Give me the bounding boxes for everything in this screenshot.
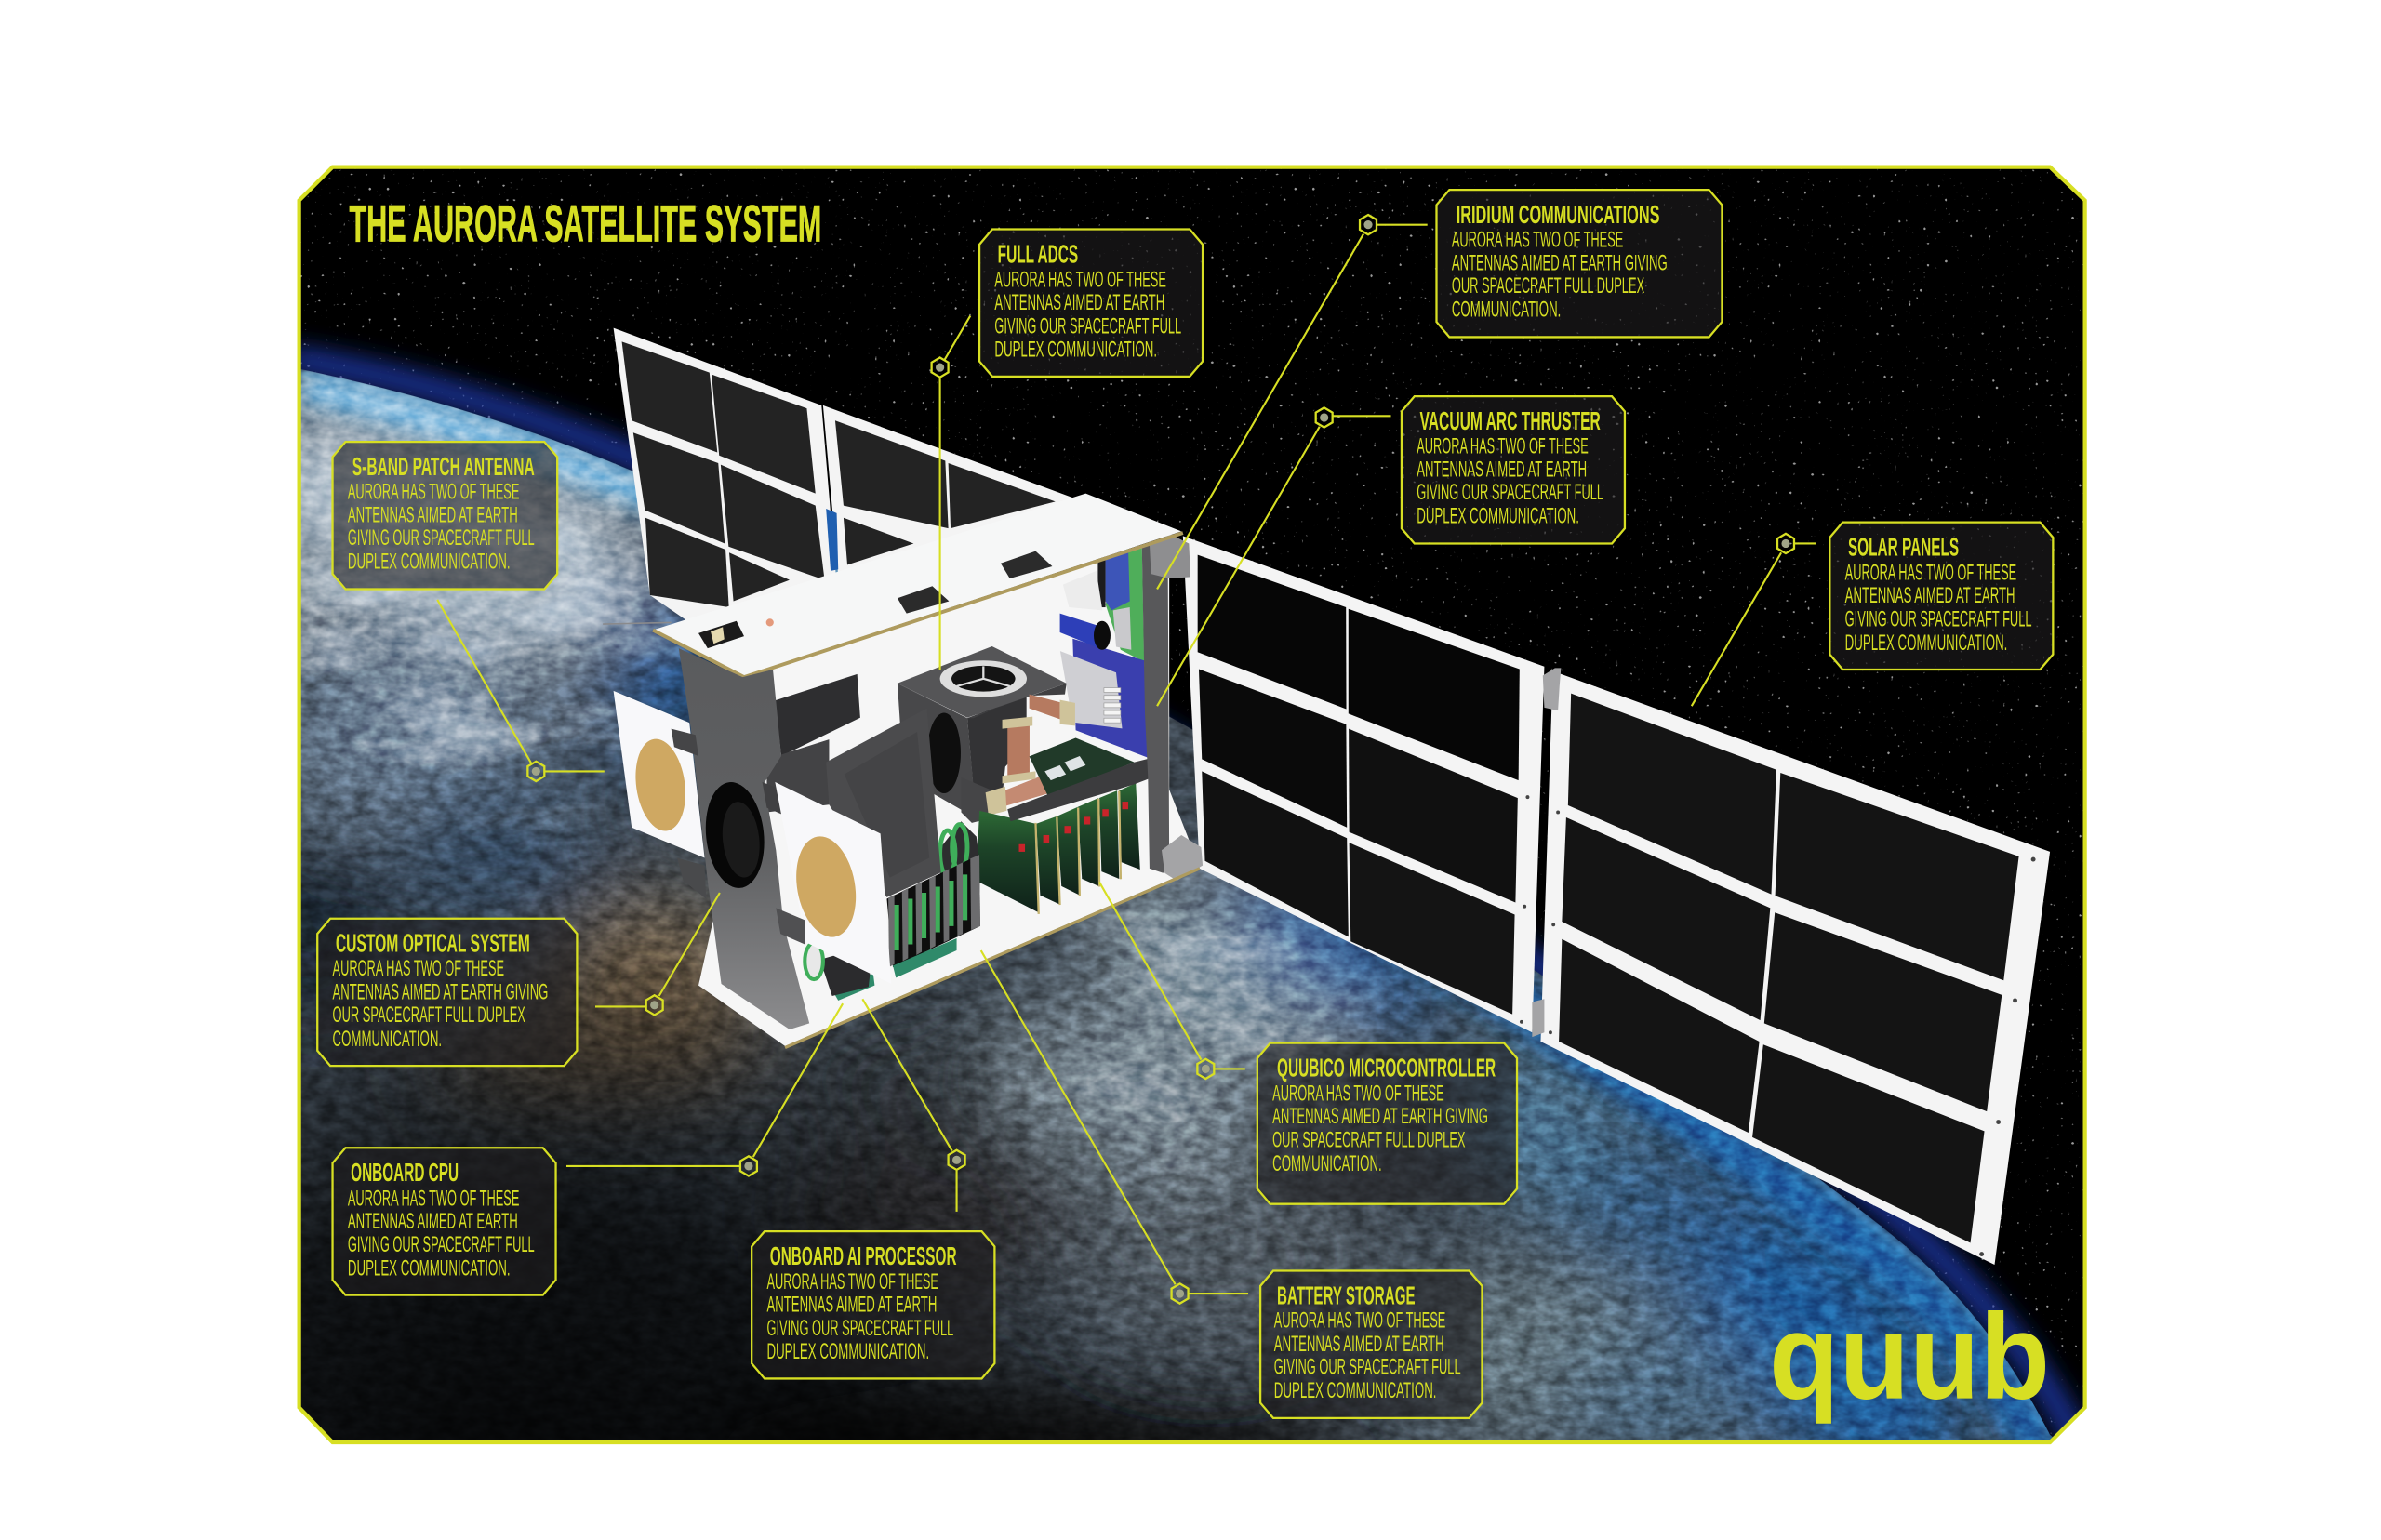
- top plate: [653, 494, 1183, 677]
- rear panel frames: [614, 328, 837, 626]
- title: THE AURORA SATELLITE SYSTEM: [350, 195, 821, 253]
- frame border: [299, 167, 2085, 1442]
- callout: S-band patch antenna: ANTENNAS AIMED AT EARTH: [348, 503, 518, 528]
- marker: [1197, 1059, 1214, 1079]
- connector 1: [698, 621, 744, 648]
- panel mounting holes: [1520, 795, 2036, 1256]
- background: space and Earth panel: [301, 169, 2083, 1440]
- leader line: [1692, 543, 1816, 706]
- cube left face: [898, 684, 977, 818]
- connector 2: [898, 586, 949, 614]
- optical aperture: [700, 779, 769, 891]
- reaction wheel ring: [940, 660, 1027, 697]
- left wing bracket lower: [677, 857, 706, 899]
- vertical coil: [1007, 725, 1030, 777]
- board 6: [1119, 783, 1140, 870]
- callout: Quubico microcontroller: OUR SPACECRAFT FULL DUPLEX: [1272, 1127, 1466, 1152]
- cube top face: [898, 646, 1067, 718]
- inner panel cells: [1198, 555, 1520, 1015]
- callout: solar panels: DUPLEX COMMUNICATION.: [1845, 631, 2007, 656]
- Earth limb bands: [299, 386, 2042, 1454]
- marker: [740, 1156, 757, 1175]
- rear panel cells: [622, 341, 1056, 607]
- callout: onboard AI processor: GIVING OUR SPACECRAFT FULL: [766, 1316, 953, 1341]
- callout: custom optical system: OUR SPACECRAFT FULL DUPLEX: [333, 1002, 525, 1028]
- leader: S-band patch antenna: [437, 600, 605, 781]
- plate gold edge: [653, 533, 1183, 677]
- bright limb highlight: [299, 372, 2050, 1436]
- leader: onboard AI processor: [862, 999, 965, 1212]
- callout: Iridium communications: OUR SPACECRAFT FULL DUPLEX: [1452, 273, 1644, 299]
- right solar panel wing inner: [1183, 536, 1544, 1032]
- lower hinge: [1162, 835, 1203, 881]
- leader: Quubico microcontroller: [1099, 883, 1245, 1079]
- cube right arm: [967, 684, 1067, 718]
- callout: full ADCS: GIVING OUR SPACECRAFT FULL: [994, 313, 1181, 339]
- marker: [646, 995, 663, 1015]
- leader: vacuum arc thruster: [1157, 407, 1391, 706]
- callout: full ADCS: DUPLEX COMMUNICATION.: [994, 338, 1157, 363]
- marker: [1172, 1283, 1189, 1304]
- marker: [949, 1150, 965, 1170]
- callout: custom optical system: COMMUNICATION.: [333, 1027, 442, 1052]
- callout: solar panels: ANTENNAS AIMED AT EARTH: [1845, 583, 2015, 608]
- leader: onboard CPU: [566, 1003, 843, 1175]
- leader: custom optical system: [595, 893, 720, 1015]
- right antenna panel: [763, 782, 891, 984]
- interior back wall and bottom plate: [698, 539, 1200, 1046]
- front frame column: [672, 648, 809, 1029]
- star field: [299, 167, 2085, 1442]
- cloud layer: [301, 500, 1387, 1175]
- grey cable: [603, 622, 672, 624]
- callout: battery storage: DUPLEX COMMUNICATION.: [1274, 1378, 1436, 1403]
- callout: onboard CPU: DUPLEX COMMUNICATION.: [348, 1255, 511, 1281]
- quub logo: quub: [1769, 1289, 2050, 1425]
- grey box inner face: [845, 732, 929, 878]
- dark opening: [1097, 552, 1106, 607]
- callout: battery storage: BATTERY STORAGE: [1277, 1281, 1416, 1309]
- callout: custom optical system: [317, 919, 577, 1066]
- callout: Quubico microcontroller: [1257, 1043, 1517, 1204]
- Earth surface: [301, 369, 2053, 1440]
- connector pins: [1104, 688, 1121, 723]
- blue capacitor: [1106, 550, 1130, 610]
- connector: [1113, 607, 1131, 650]
- white bracket: [1060, 651, 1123, 728]
- copper magnetorquer coils: [986, 695, 1075, 816]
- leader line: [862, 999, 957, 1212]
- callout: solar panels: [1829, 523, 2053, 670]
- battery rear housing: [938, 821, 979, 883]
- lower battery body: [820, 945, 873, 996]
- callout: S-band patch antenna: GIVING OUR SPACECRAFT FULL: [348, 525, 535, 551]
- callout: Quubico microcontroller: AURORA HAS TWO OF THESE: [1272, 1082, 1444, 1107]
- Earth tonal regions: [301, 370, 2002, 1440]
- marker: [932, 357, 949, 378]
- callout: custom optical system: ANTENNAS AIMED AT EARTH GIVING: [333, 979, 548, 1004]
- callout: vacuum arc thruster: VACUUM ARC THRUSTER: [1420, 406, 1601, 435]
- right frame column: [1142, 536, 1169, 873]
- board 3: [1057, 807, 1080, 896]
- callout: vacuum arc thruster: ANTENNAS AIMED AT EARTH: [1417, 458, 1587, 483]
- leader: battery storage: [981, 950, 1248, 1304]
- callout: Iridium communications: IRIDIUM COMMUNICATIONS: [1457, 200, 1659, 229]
- red chips: [1019, 802, 1128, 852]
- callout: onboard AI processor: AURORA HAS TWO OF THESE: [766, 1269, 938, 1294]
- PCB boards: [976, 783, 1140, 912]
- callout: S-band patch antenna: DUPLEX COMMUNICATION.: [348, 549, 511, 574]
- callout: Iridium communications: ANTENNAS AIMED AT EARTH GIVING: [1452, 251, 1668, 276]
- right patch antenna gold disc: [789, 831, 863, 942]
- green circuit board and capacitor: [1063, 547, 1144, 662]
- callout: onboard CPU: [333, 1148, 556, 1295]
- right bracket: [763, 782, 791, 818]
- callout: solar panels: AURORA HAS TWO OF THESE: [1845, 561, 2016, 586]
- callout: onboard AI processor: ANTENNAS AIMED AT EARTH: [766, 1293, 937, 1318]
- left antenna panel: [614, 691, 705, 857]
- grey beam: [766, 739, 829, 812]
- callout: battery storage: [1260, 1271, 1482, 1418]
- cylinder end: [1094, 621, 1111, 650]
- tray boards: [1030, 737, 1135, 796]
- callout: S-band patch antenna: [333, 442, 557, 589]
- green cells: [897, 874, 965, 950]
- lower battery cell: [805, 943, 823, 979]
- aperture inner: [719, 800, 763, 879]
- atmosphere glow: [288, 358, 2083, 1453]
- tray front beam: [1007, 758, 1152, 821]
- satellite illustration: [603, 328, 2050, 1265]
- callout: solar panels: SOLAR PANELS: [1848, 533, 1959, 562]
- callout: vacuum arc thruster: [1402, 396, 1625, 543]
- battery block: [832, 821, 980, 1001]
- callout: S-band patch antenna: S-BAND PATCH ANTENNA: [352, 452, 535, 481]
- left panel body: [614, 691, 705, 857]
- callout: custom optical system: AURORA HAS TWO OF THESE: [333, 956, 504, 981]
- marker: [1316, 407, 1333, 428]
- dark side of Earth: [299, 759, 1514, 1442]
- leader line: [1157, 416, 1391, 706]
- inner panel frame: [1183, 536, 1544, 1032]
- green battery rings: [940, 825, 967, 876]
- dark mounting plate: [775, 674, 860, 756]
- right solar panel wing outer: [1520, 671, 2050, 1265]
- battery grille base: [886, 855, 980, 967]
- left patch antenna gold disc: [630, 736, 691, 834]
- side reaction wheel: [927, 713, 961, 793]
- callout: onboard CPU: AURORA HAS TWO OF THESE: [348, 1186, 519, 1211]
- wheel spokes: [957, 666, 1010, 686]
- marker: [527, 762, 544, 781]
- wing hinges: [1532, 668, 1561, 1037]
- board 1: [976, 811, 1039, 912]
- callout: Quubico microcontroller: COMMUNICATION.: [1272, 1151, 1382, 1176]
- callout: full ADCS: FULL ADCS: [998, 239, 1078, 268]
- leader: full ADCS: [932, 316, 970, 670]
- lower coil: [1004, 774, 1048, 806]
- cube lower piece: [961, 777, 990, 823]
- outer panel frame: [1540, 671, 2050, 1265]
- board 4: [1078, 798, 1098, 886]
- column face: [679, 648, 809, 1029]
- connector 3: [1001, 551, 1052, 578]
- small pcb strip: [893, 938, 957, 977]
- white module: [1063, 571, 1102, 610]
- Earth base colour: [299, 304, 2085, 1457]
- reaction wheel opening: [951, 666, 1016, 692]
- callout: Quubico microcontroller: ANTENNAS AIMED AT EARTH GIVING: [1272, 1104, 1488, 1129]
- board 5: [1099, 790, 1119, 879]
- callout: full ADCS: ANTENNAS AIMED AT EARTH: [994, 290, 1164, 315]
- ADCS cube: [898, 646, 1067, 823]
- board 2: [1036, 816, 1060, 905]
- coil mounts: [986, 700, 1075, 816]
- copper pad: [766, 618, 774, 626]
- leader: solar panels: [1692, 534, 1816, 706]
- connector 1 face: [711, 627, 725, 644]
- lower pcb strip: [832, 974, 874, 1001]
- callout: solar panels: GIVING OUR SPACECRAFT FULL: [1845, 606, 2031, 631]
- upper coil: [1030, 695, 1060, 719]
- leader line: [566, 1003, 843, 1166]
- outer panel cells: [1559, 694, 2019, 1242]
- callout: onboard CPU: ANTENNAS AIMED AT EARTH: [348, 1209, 518, 1234]
- cube interior: [967, 696, 1027, 804]
- blue cylinder: [1060, 614, 1099, 648]
- leader line: [940, 316, 970, 670]
- rear panel blue gap: [826, 509, 838, 571]
- surface mottled texture: [299, 304, 2085, 1442]
- callout: battery storage: GIVING OUR SPACECRAFT FULL: [1274, 1355, 1461, 1380]
- callout: full ADCS: AURORA HAS TWO OF THESE: [994, 268, 1166, 293]
- lower right bracket: [776, 908, 805, 945]
- callout: Iridium communications: [1436, 190, 1722, 337]
- grey box housing: [826, 709, 941, 897]
- callout: vacuum arc thruster: AURORA HAS TWO OF THESE: [1417, 433, 1589, 458]
- callout: onboard AI processor: ONBOARD AI PROCESSOR: [770, 1241, 957, 1270]
- callout: onboard AI processor: [752, 1231, 994, 1378]
- callout: vacuum arc thruster: GIVING OUR SPACECRAFT FULL: [1417, 480, 1603, 505]
- lower battery: [805, 943, 873, 996]
- green board: [1106, 547, 1144, 662]
- callout: battery storage: ANTENNAS AIMED AT EARTH: [1274, 1332, 1444, 1357]
- callout: onboard CPU: ONBOARD CPU: [351, 1158, 459, 1187]
- marker: [1777, 534, 1794, 553]
- leader line: [1157, 225, 1428, 589]
- callout: vacuum arc thruster: DUPLEX COMMUNICATION.: [1417, 503, 1579, 528]
- grille bars: [888, 855, 980, 967]
- plate surface: [653, 494, 1181, 676]
- callout: onboard AI processor: DUPLEX COMMUNICATION.: [766, 1339, 929, 1364]
- bottom plate gold edge: [785, 869, 1200, 1048]
- callout: Iridium communications: COMMUNICATION.: [1452, 297, 1561, 322]
- leader line: [981, 950, 1248, 1294]
- callout: full ADCS: [979, 230, 1203, 377]
- leader line: [1099, 883, 1245, 1069]
- leader: Iridium communications: [1157, 215, 1428, 589]
- rear solar panel wing: [603, 328, 1085, 626]
- board edges: [1035, 791, 1121, 914]
- callout: custom optical system: CUSTOM OPTICAL SYSTEM: [336, 929, 530, 958]
- callout: S-band patch antenna: AURORA HAS TWO OF THESE: [348, 479, 519, 504]
- upper hinge: [1150, 535, 1190, 578]
- blue panel: [1072, 639, 1148, 758]
- space background: [299, 167, 2085, 1442]
- marker: [1360, 215, 1377, 234]
- right panel body: [775, 782, 891, 984]
- callout: onboard CPU: GIVING OUR SPACECRAFT FULL: [348, 1232, 535, 1257]
- leader line: [437, 600, 605, 771]
- callout: Iridium communications: AURORA HAS TWO OF THESE: [1452, 227, 1623, 252]
- callout: Quubico microcontroller: QUUBICO MICROCONTROLLER: [1277, 1054, 1496, 1082]
- callout: battery storage: AURORA HAS TWO OF THESE: [1274, 1308, 1445, 1334]
- left wing bracket upper: [672, 729, 698, 756]
- tray components: [1044, 756, 1085, 780]
- leader line: [595, 893, 720, 1006]
